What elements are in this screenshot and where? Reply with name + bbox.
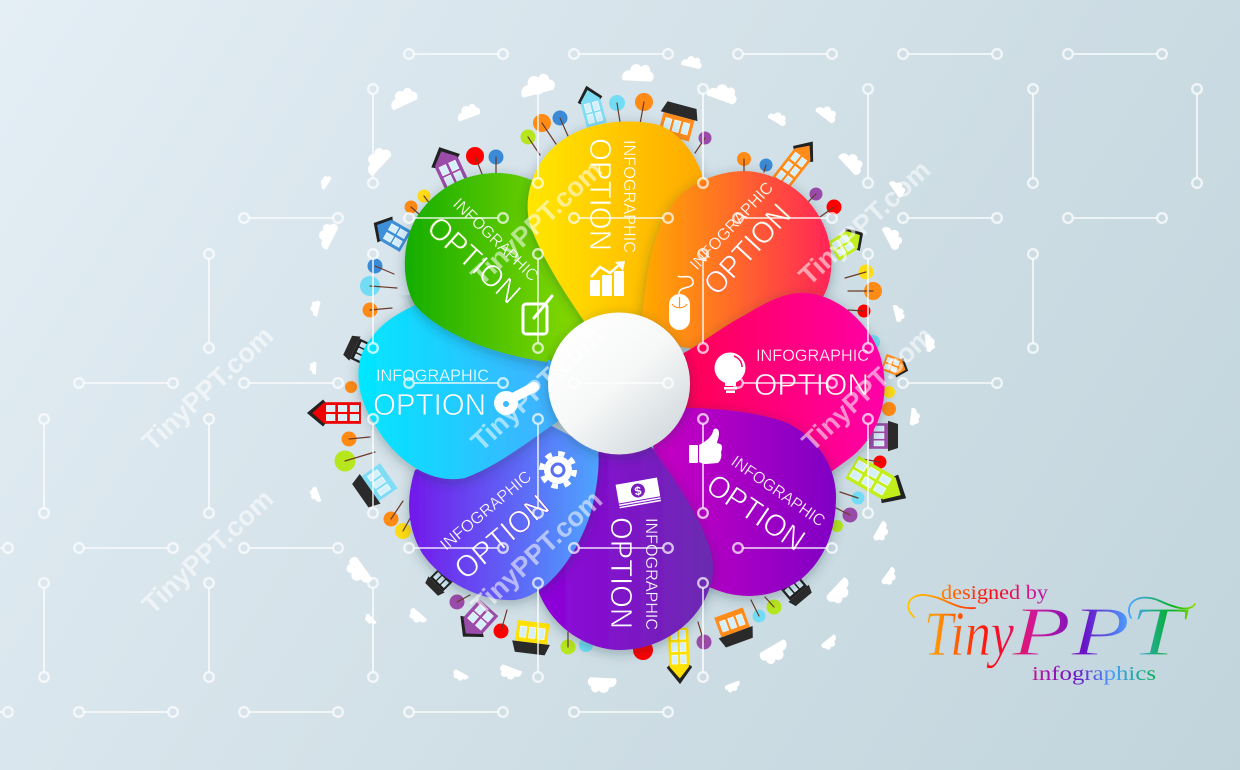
- option: pink: [714, 347, 869, 402]
- option: bottom violet: [604, 478, 661, 630]
- option: blue violet: INFOGRAPHIC: [437, 468, 535, 554]
- option: yellow: OPTION: [583, 138, 618, 251]
- icon: banknotes: [616, 478, 661, 508]
- option: yellow: INFOGRAPHIC: [620, 140, 638, 253]
- petal: orange: [640, 171, 831, 350]
- center circle: [548, 312, 690, 454]
- watermarks: TinyPPT.com: [796, 321, 939, 457]
- petal: green overlap on cyan: [402, 295, 548, 372]
- option: purple: INFOGRAPHIC: [728, 453, 828, 530]
- option: pink: INFOGRAPHIC: [756, 347, 869, 365]
- icon: bar chart: [590, 261, 625, 296]
- watermarks: TinyPPT.com: [136, 484, 279, 620]
- petal: green: [405, 173, 600, 362]
- option: orange: OPTION: [697, 197, 798, 302]
- option: cyan: [373, 367, 534, 422]
- option: orange: [669, 179, 798, 330]
- petal: blue violet: [409, 420, 599, 600]
- petal: yellow: [528, 121, 705, 340]
- petal: bottom violet: [538, 445, 713, 650]
- option: orange: INFOGRAPHIC: [687, 179, 777, 274]
- clouds ring: [308, 54, 936, 694]
- option: purple: [689, 429, 828, 558]
- watermarks: TinyPPT.com: [465, 321, 608, 457]
- petal: pink: [680, 293, 885, 480]
- option: purple: OPTION: [700, 467, 812, 558]
- option: cyan: INFOGRAPHIC: [376, 367, 489, 385]
- option: blue violet: OPTION: [448, 488, 556, 586]
- icon: light bulb: [714, 352, 746, 393]
- logo: [908, 582, 1195, 685]
- watermarks: TinyPPT.com: [136, 321, 279, 457]
- icon: gear: [542, 454, 574, 486]
- logo: PPT: [1011, 594, 1191, 671]
- logo: designed by: [941, 582, 1048, 604]
- option: bottom violet: INFOGRAPHIC: [642, 518, 660, 630]
- icon: key: [494, 387, 534, 415]
- option: green: OPTION: [420, 209, 528, 311]
- petal: purple: [650, 408, 836, 596]
- icon: thumbs up: [689, 429, 722, 464]
- icon: notepad and pencil: [523, 296, 552, 334]
- option: green: [420, 195, 552, 334]
- trees ring: [334, 93, 896, 660]
- icon: computer mouse: [669, 276, 693, 330]
- option: yellow: [583, 138, 638, 296]
- petal: cyan: [358, 303, 560, 479]
- watermarks: TinyPPT.com: [793, 155, 936, 291]
- option: green: INFOGRAPHIC: [449, 195, 542, 285]
- logo: infographics: [1032, 663, 1156, 685]
- option: bottom violet: OPTION: [604, 517, 639, 629]
- logo: Tiny: [924, 598, 1014, 669]
- option: blue violet: [437, 454, 574, 586]
- flower petals: [358, 121, 885, 650]
- watermarks: TinyPPT.com: [465, 155, 608, 291]
- option: pink: OPTION: [754, 367, 869, 402]
- watermarks: [136, 155, 939, 621]
- icon: banknotes: $: [633, 483, 643, 498]
- houses ring: [307, 82, 914, 685]
- option: cyan: OPTION: [373, 387, 486, 422]
- watermarks: TinyPPT.com: [465, 485, 608, 621]
